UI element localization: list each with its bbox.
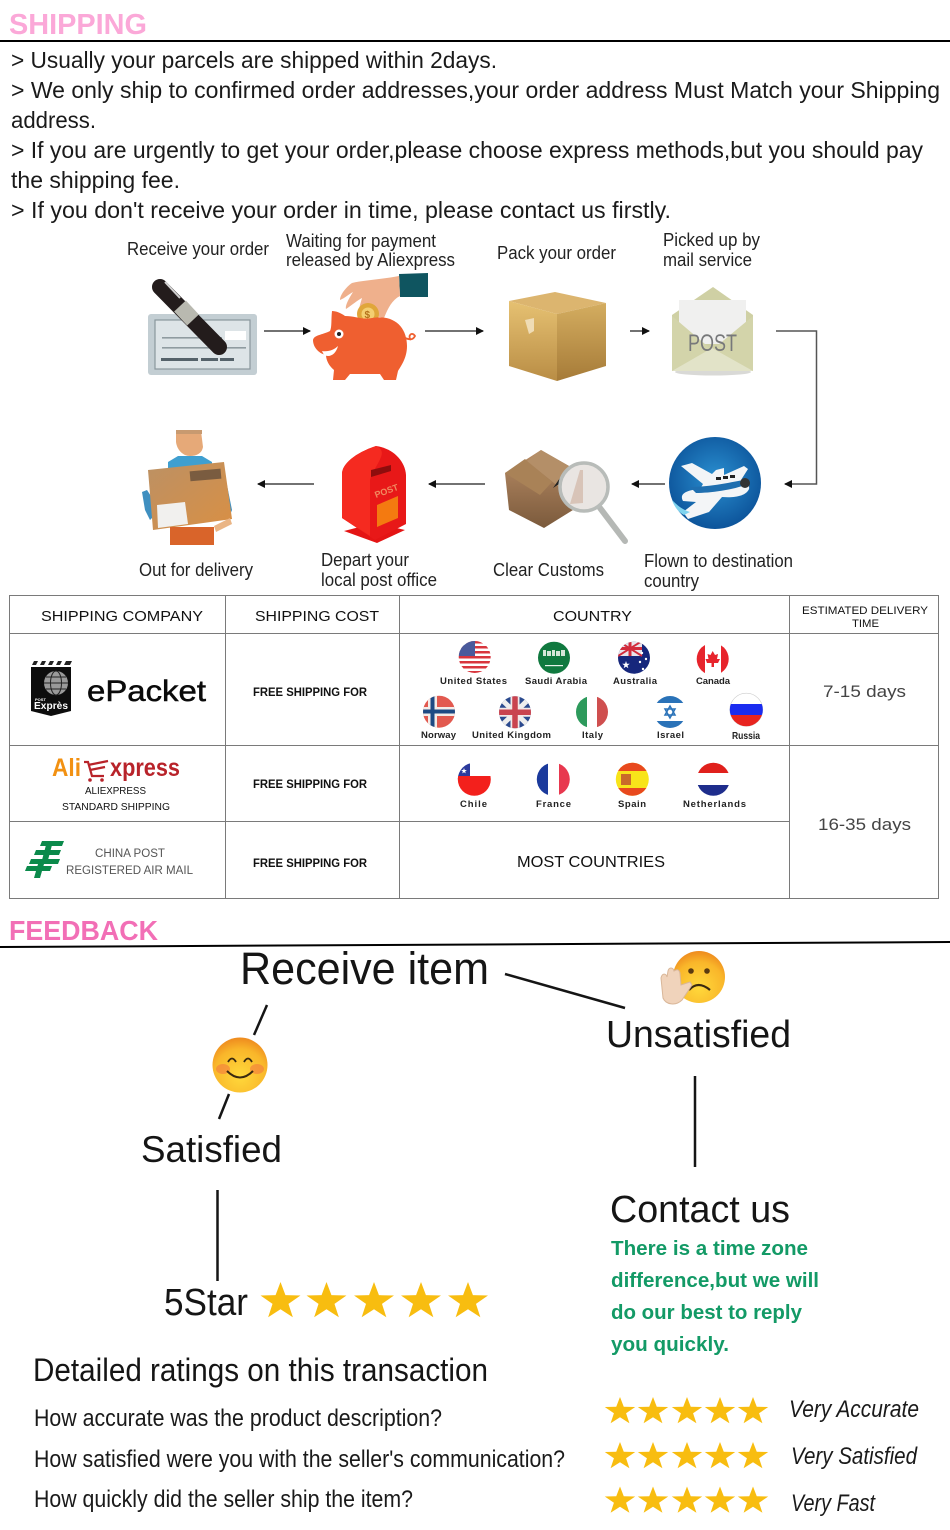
connector: receive to satisfied bbox=[219, 1005, 267, 1119]
country names: United Kingdom bbox=[472, 730, 551, 741]
logo: AliExpress standard shipping bbox=[52, 754, 180, 813]
label: picked up by mail service: mail service bbox=[663, 250, 752, 270]
flag: Australia bbox=[618, 642, 650, 674]
country names: Saudi Arabia bbox=[525, 676, 588, 687]
label: waiting for payment bbox=[286, 231, 455, 270]
logo: AliExpress standard shipping: Ali bbox=[52, 754, 81, 782]
header row: TIME bbox=[852, 618, 879, 630]
label: depart your local post office: Depart your bbox=[321, 550, 409, 570]
text block: time zone note: difference,but we will bbox=[611, 1269, 819, 1292]
arrow bbox=[429, 483, 485, 485]
connector: satisfied to 5 star bbox=[216, 1190, 219, 1281]
text block: shipping notes: > If you are urgently to get your order,please choose express methods,but you should pay bbox=[11, 137, 923, 163]
label: flown to destination country: Flown to destination bbox=[644, 551, 793, 571]
text: most countries: MOST COUNTRIES bbox=[517, 854, 665, 871]
rating row: communication bbox=[34, 1442, 918, 1473]
heading: shipping: SHIPPING bbox=[9, 9, 147, 41]
label: picked up by mail service: Picked up by bbox=[663, 230, 760, 250]
label: waiting for payment: released by Aliexpress bbox=[286, 250, 455, 270]
delivery time: 16-35 days: 16-35 days bbox=[818, 816, 911, 834]
flag: Italy bbox=[576, 696, 608, 728]
icon: post envelope bbox=[672, 287, 753, 376]
flag: Saudi Arabia bbox=[538, 642, 570, 674]
delivery time: 7-15 days: 7-15 days bbox=[823, 683, 906, 701]
icon: plane in blue circle bbox=[669, 437, 761, 529]
rating row: shipping speed bbox=[34, 1486, 876, 1517]
header row: COUNTRY bbox=[553, 608, 632, 625]
panel: feedback section bbox=[0, 915, 950, 1517]
country names bbox=[421, 676, 760, 810]
shipping cost column: FREE SHIPPING FOR bbox=[253, 687, 368, 699]
arrow bbox=[632, 483, 665, 485]
icon: cardboard box bbox=[509, 292, 606, 381]
flag: Israel bbox=[656, 696, 684, 728]
arrow bbox=[264, 330, 310, 332]
country names: Australia bbox=[613, 676, 658, 687]
country names: France bbox=[536, 799, 571, 810]
label: waiting for payment: Waiting for payment bbox=[286, 231, 436, 251]
logo: ePacket bbox=[31, 661, 207, 716]
flag: Russia bbox=[729, 693, 764, 727]
rating row: shipping speed: How quickly did the seller ship the item? bbox=[34, 1486, 413, 1513]
logo: AliExpress standard shipping: STANDARD SHIPPING bbox=[62, 801, 170, 813]
label: flown to destination country: country bbox=[644, 571, 699, 591]
icon: cheque and pen bbox=[148, 282, 257, 375]
country names: Netherlands bbox=[683, 799, 746, 810]
country names: Canada bbox=[696, 676, 731, 687]
flag: United Kingdom bbox=[499, 696, 531, 728]
logo: ePacket: ePacket bbox=[87, 675, 207, 708]
shipping cost column: FREE SHIPPING FOR bbox=[253, 858, 368, 870]
icon: delivery man with parcel bbox=[142, 430, 232, 545]
country names: Spain bbox=[618, 799, 646, 810]
country names: Norway bbox=[421, 730, 457, 741]
text block: time zone note bbox=[611, 1237, 819, 1356]
label: depart your local post office: local post office bbox=[321, 570, 437, 590]
rating row: communication: How satisfied were you with the seller's communication? bbox=[34, 1446, 565, 1473]
country names: United States bbox=[440, 676, 507, 687]
country names: Italy bbox=[582, 730, 604, 741]
arrow bbox=[425, 330, 483, 332]
shipping cost column: FREE SHIPPING FOR bbox=[253, 779, 368, 791]
header row: SHIPPING COST bbox=[255, 608, 379, 625]
label: picked up by mail service bbox=[663, 230, 760, 270]
logo: AliExpress standard shipping: xpress bbox=[110, 754, 180, 782]
text: contact us: Contact us bbox=[610, 1189, 790, 1231]
country names: Israel bbox=[657, 730, 684, 741]
icon: piggy bank and hand bbox=[313, 273, 428, 380]
rating row: accuracy bbox=[34, 1396, 919, 1432]
text block: time zone note: you quickly. bbox=[611, 1333, 729, 1356]
text block: shipping notes bbox=[11, 47, 940, 223]
text: unsatisfied: Unsatisfied bbox=[606, 1014, 791, 1056]
text block: shipping notes: > Usually your parcels are shipped within 2days. bbox=[11, 47, 497, 73]
header row bbox=[41, 605, 929, 630]
rating row: shipping speed: Very Fast bbox=[791, 1490, 876, 1517]
arrow: elbow connector bbox=[776, 331, 816, 484]
flag: Netherlands bbox=[698, 762, 729, 796]
flag: France bbox=[536, 764, 570, 795]
logo: China Post registered air mail bbox=[25, 841, 194, 878]
rating row: accuracy: How accurate was the product description? bbox=[34, 1405, 442, 1432]
logo: AliExpress standard shipping: ALIEXPRESS bbox=[85, 785, 146, 797]
text: receive item: Receive item bbox=[240, 943, 489, 994]
flag: Norway bbox=[423, 696, 455, 728]
logo: China Post registered air mail: REGISTERED AIR MAIL bbox=[66, 865, 194, 877]
icon: red post box: POST bbox=[373, 482, 400, 500]
label: out for delivery: Out for delivery bbox=[139, 560, 253, 580]
flag: United States bbox=[458, 641, 492, 674]
rating: 5 star bbox=[164, 1282, 488, 1324]
country names: Russia bbox=[732, 730, 760, 742]
connector: unsatisfied to contact us bbox=[694, 1076, 696, 1167]
text: satisfied: Satisfied bbox=[141, 1129, 282, 1170]
label: receive your order: Receive your order bbox=[127, 239, 269, 259]
rating row: accuracy: Very Accurate bbox=[789, 1396, 919, 1423]
flag: Chile bbox=[458, 764, 491, 796]
heading: detailed ratings: Detailed ratings on this transaction bbox=[33, 1352, 488, 1388]
heading: feedback: FEEDBACK bbox=[9, 915, 158, 946]
flag: Canada bbox=[696, 645, 729, 673]
icon: smiling emoji bbox=[212, 1038, 268, 1092]
logo: ePacket: Exprès bbox=[34, 701, 68, 712]
icon: box with magnifier bbox=[505, 450, 625, 541]
table grid bbox=[10, 596, 938, 898]
header row: ESTIMATED DELIVERY bbox=[802, 605, 929, 617]
connector: receive to unsatisfied bbox=[505, 974, 625, 1008]
logo: China Post registered air mail: CHINA POST bbox=[95, 848, 165, 860]
icon: unhappy emoji with raised hand bbox=[661, 951, 725, 1004]
country names: Chile bbox=[460, 799, 487, 810]
panel: shipping section bbox=[0, 9, 950, 898]
text block: shipping notes: > We only ship to confirmed order addresses,your order address Must Match your Shipping bbox=[11, 77, 940, 103]
text block: time zone note: do our best to reply bbox=[611, 1301, 803, 1324]
arrow bbox=[630, 330, 649, 332]
header row: SHIPPING COMPANY bbox=[41, 608, 203, 625]
text block: shipping notes: > If you don't receive your order in time, please contact us firstly. bbox=[11, 197, 671, 223]
text block: shipping notes: address. bbox=[11, 107, 96, 133]
table: shipping options bbox=[10, 596, 938, 898]
icon: red post box bbox=[342, 446, 406, 543]
label: depart your local post office bbox=[321, 550, 437, 590]
logo: ePacket: POST bbox=[35, 697, 46, 702]
text block: time zone note: There is a time zone bbox=[611, 1237, 808, 1260]
icon: post envelope: POST bbox=[688, 330, 737, 357]
rating row: communication: Very Satisfied bbox=[791, 1443, 918, 1470]
label: clear customs: Clear Customs bbox=[493, 560, 604, 580]
rating: 5 star: 5Star bbox=[164, 1282, 248, 1324]
icon: piggy bank and hand: $ bbox=[364, 310, 370, 321]
flag: Spain bbox=[615, 762, 650, 797]
text block: shipping notes: the shipping fee. bbox=[11, 167, 180, 193]
arrow bbox=[258, 483, 314, 485]
flow diagram: order process bbox=[127, 230, 816, 591]
label: flown to destination country bbox=[644, 551, 793, 591]
shipping cost column bbox=[253, 687, 368, 870]
label: pack your order: Pack your order bbox=[497, 243, 616, 263]
